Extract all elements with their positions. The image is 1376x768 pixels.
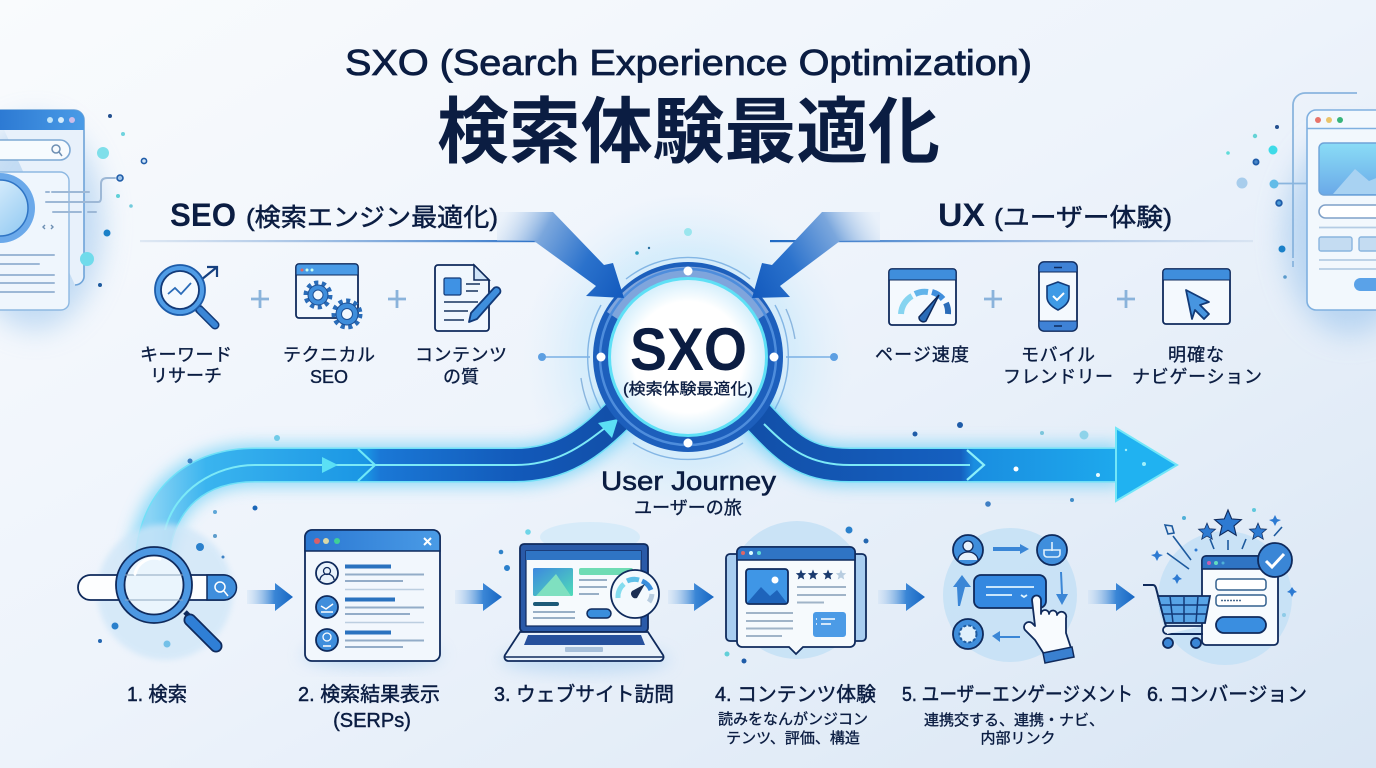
journey ribbon: incoming — [152, 408, 625, 560]
heading: SEO: SEO — [170, 197, 236, 233]
heading: user journey — [601, 466, 777, 518]
heading: UX: UX — [938, 197, 986, 233]
step labels: 内部リンク — [980, 730, 1056, 747]
hub: connector stubs — [542, 356, 834, 358]
labels: SEO factors: テクニカル — [283, 345, 375, 365]
icon: plus — [251, 290, 406, 308]
icon: technical SEO — [296, 264, 360, 327]
labels: SEO factors: リサーチ — [150, 366, 222, 386]
icon: clear navigation — [1163, 269, 1230, 324]
left decorative browser window — [0, 110, 115, 330]
labels: UX factors: モバイル — [1021, 345, 1095, 365]
heading: user journey: User Journey — [601, 466, 777, 496]
step labels: (SERPs) — [333, 710, 411, 732]
center glow — [523, 192, 853, 522]
right decorative browser window — [1284, 93, 1376, 335]
right decorative dots — [1226, 125, 1307, 279]
heading: user journey: ユーザーの旅 — [634, 498, 742, 518]
heading: UX: (ユーザー体験) — [994, 204, 1172, 232]
arrow: SEO into SXO — [497, 212, 624, 298]
step labels: 連携交する、連携・ナビ、 — [924, 712, 1104, 729]
step labels: 2. 検索結果表示 — [298, 683, 440, 706]
step 6 icon: conversion — [1143, 508, 1297, 665]
step labels — [127, 682, 1307, 747]
hub: ring — [593, 262, 783, 452]
hub: outer arcs — [588, 257, 788, 459]
arrow: UX into SXO — [752, 212, 880, 298]
labels: UX factors: ページ速度 — [875, 345, 969, 365]
step 2 icon: search results window — [302, 530, 442, 667]
step labels: 6. コンバージョン — [1147, 684, 1307, 706]
labels: UX factors: ナビゲーション — [1132, 367, 1262, 387]
labels: SEO factors — [140, 345, 507, 387]
icon: page speed — [889, 269, 956, 325]
hub: SXO text: SXO — [630, 316, 747, 383]
step labels: 読みをなんがンジコン — [718, 711, 868, 728]
step labels: 5. ユーザーエンゲージメント — [902, 683, 1133, 706]
arrow: step 3 to 4 — [668, 583, 714, 611]
ribbon decorative dots — [188, 422, 1088, 514]
SXO hub — [538, 228, 838, 459]
arrow: step 4 to 5 — [878, 583, 925, 611]
labels: SEO factors: キーワード — [140, 345, 232, 365]
hub: subtitle: (検索体験最適化) — [623, 380, 753, 398]
icon: mobile friendly — [1039, 262, 1077, 331]
journey ribbon: outgoing arrow — [750, 408, 1177, 501]
title: english: SXO (Search Experience Optimization) — [345, 42, 1032, 83]
arrow: step 5 to 6 — [1088, 583, 1135, 611]
journey ribbon glow — [150, 408, 1120, 560]
heading: SEO — [170, 197, 498, 233]
arrow: step 1 to 2 — [247, 583, 293, 611]
divider lines — [140, 240, 1253, 242]
step labels: 3. ウェブサイト訪問 — [494, 682, 674, 706]
left decorative dots — [80, 114, 147, 287]
labels: UX factors — [875, 345, 1262, 387]
labels: SEO factors: コンテンツ — [415, 345, 507, 365]
heading: SEO: (検索エンジン最適化) — [246, 204, 498, 232]
labels: SEO factors: SEO — [310, 367, 348, 387]
step 3 icon: laptop — [499, 522, 670, 673]
icon: keyword research — [155, 265, 217, 325]
step 1 icon: search — [78, 524, 236, 660]
icon: content quality — [435, 265, 500, 331]
step labels: 1. 検索 — [127, 683, 187, 706]
labels: UX factors: 明確な — [1168, 345, 1224, 365]
labels: SEO factors: の質 — [443, 367, 479, 387]
icon: plus UX — [984, 290, 1135, 308]
heading: UX — [938, 197, 1172, 233]
labels: UX factors: フレンドリー — [1003, 367, 1113, 387]
step labels: テンツ、評価、構造 — [726, 730, 860, 747]
arrow: step 2 to 3 — [455, 583, 502, 611]
step 4 icon: content window — [724, 521, 868, 664]
burst and stars — [1198, 510, 1267, 539]
step 5 icon: engagement — [943, 528, 1077, 663]
step labels: 4. コンテンツ体験 — [715, 683, 876, 706]
title: japanese: 検索体験最適化 — [437, 93, 940, 173]
